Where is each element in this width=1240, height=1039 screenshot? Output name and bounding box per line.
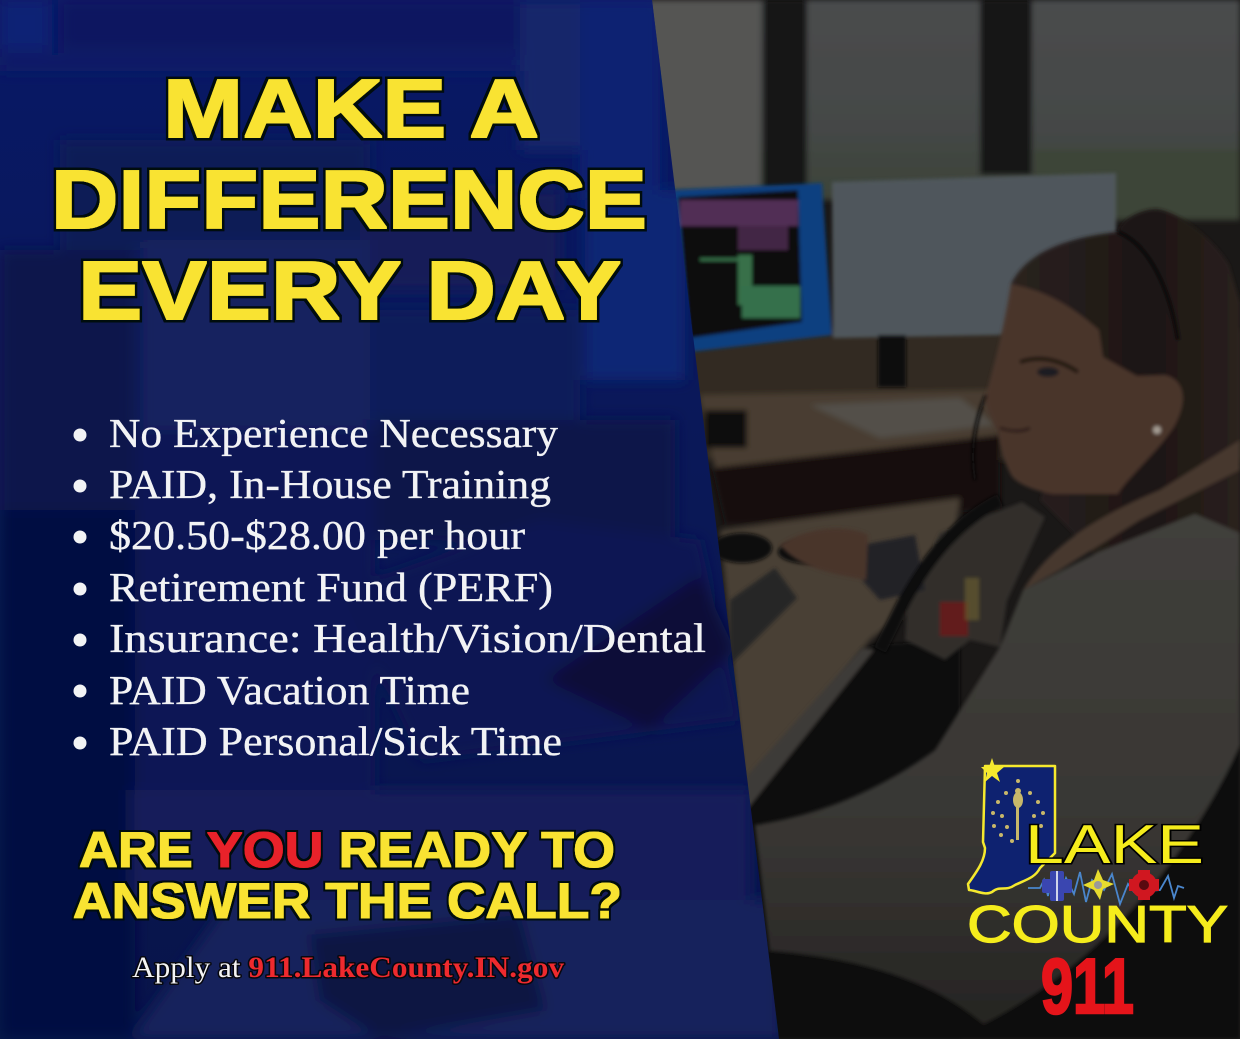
sleeve cuff (862, 535, 925, 600)
mouse and keyboard (712, 533, 960, 1039)
icon: sheriff star (1083, 869, 1114, 900)
title: EVERY DAY (78, 244, 621, 337)
bullet: pay range: $20.50-$28.00 per hour (109, 512, 525, 558)
panel background screens (0, 0, 780, 1039)
lower shadow (950, 745, 1240, 1039)
logo: Lake County 911 (967, 758, 1228, 1030)
icon: torch and stars (991, 779, 1045, 843)
benefits list (74, 410, 706, 764)
jacket logo (940, 602, 968, 636)
icon: star of life (1042, 871, 1072, 901)
bullet: insurance: Insurance: Health/Vision/Dental (109, 615, 706, 661)
call to action heading: ARE YOU READY TO (79, 822, 615, 878)
bullet: vacation: PAID Vacation Time (109, 667, 470, 713)
panel: blue overlay (0, 0, 780, 1039)
title: DIFFERENCE (51, 153, 647, 246)
logo word: 911: 911 (1041, 942, 1134, 1030)
headband (1118, 232, 1178, 340)
woman (700, 209, 1240, 1039)
bullet: no experience: No Experience Necessary (109, 410, 559, 456)
call to action heading (73, 822, 622, 929)
window and pillars (640, 0, 1240, 220)
headset wire (973, 395, 986, 480)
bullet: retirement: Retirement Fund (PERF) (109, 564, 553, 610)
apply link: Apply at 911.LakeCounty.IN.gov (132, 951, 564, 984)
blond hair strand (1023, 440, 1240, 590)
hair (1011, 209, 1240, 560)
title (51, 62, 647, 337)
hand on mouse (780, 528, 868, 580)
desk and back wall (680, 330, 1240, 800)
jacket (755, 514, 1240, 1039)
logo word: COUNTY: COUNTY (967, 896, 1228, 954)
icon: fire maltese cross (1129, 870, 1159, 900)
call to action heading: ANSWER THE CALL? (73, 873, 622, 929)
lanyard (880, 500, 1000, 650)
face (986, 284, 1183, 494)
bullet: personal sick: PAID Personal/Sick Time (109, 718, 562, 764)
icon: corner star (981, 758, 1004, 782)
icon: heartbeat line with emblems (1028, 869, 1184, 904)
icon: Indiana state outline (968, 758, 1055, 893)
monitors (672, 173, 1116, 387)
logo word: LAKE: LAKE (1025, 813, 1204, 875)
title: MAKE A (163, 62, 539, 155)
chest (905, 502, 1045, 660)
bullet: paid training: PAID, In-House Training (109, 461, 551, 507)
